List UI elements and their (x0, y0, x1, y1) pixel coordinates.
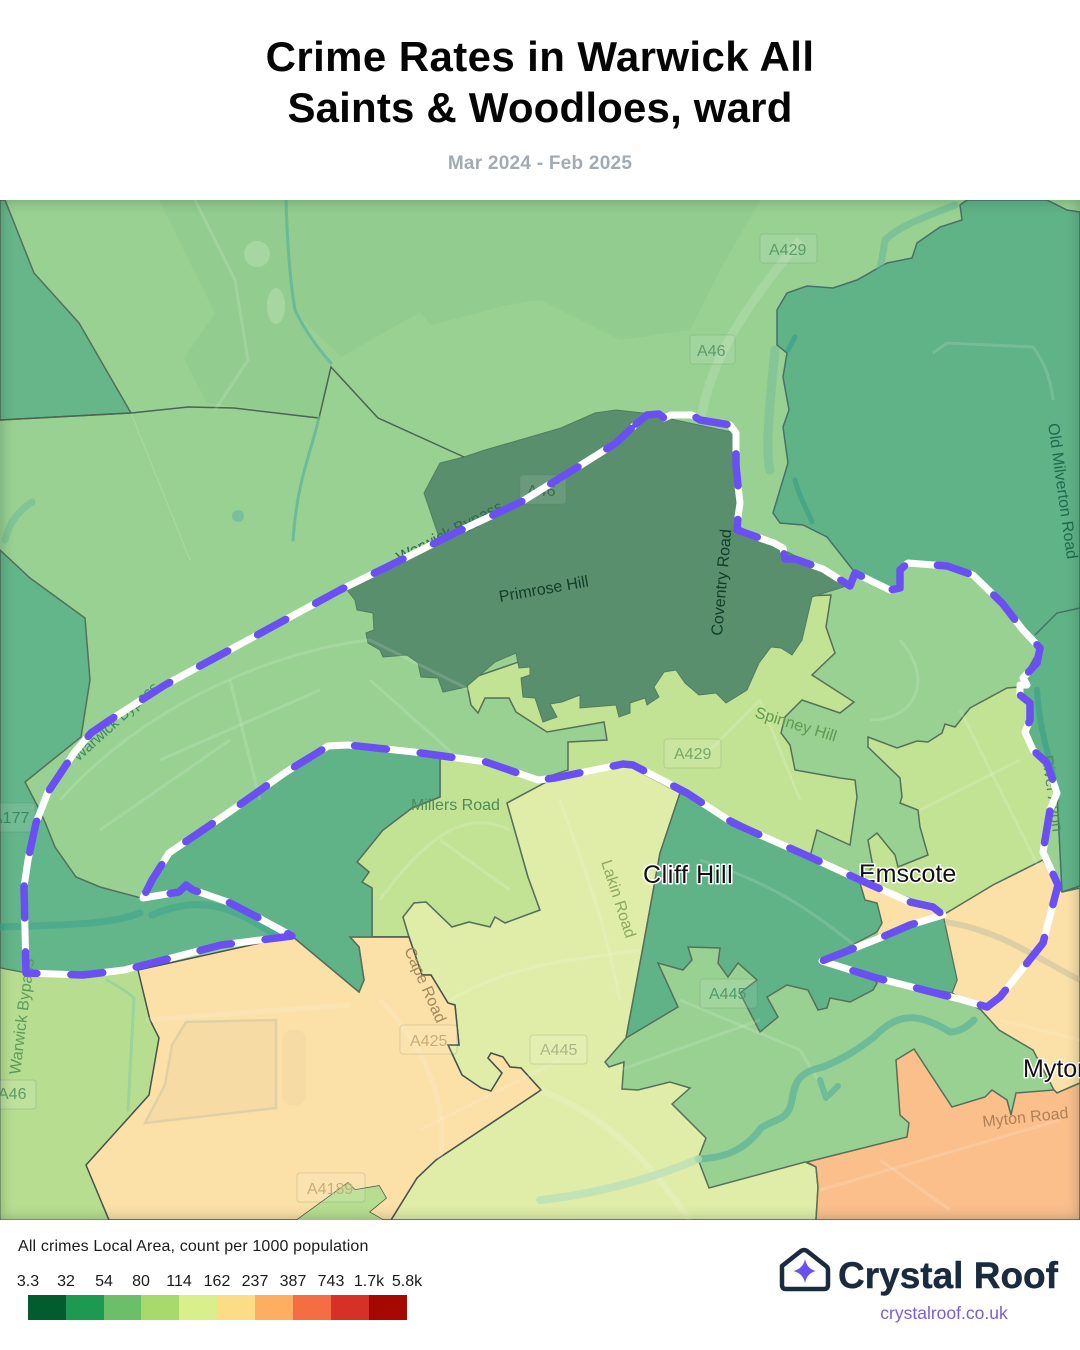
road labels: Warwick Bypass (69, 679, 162, 765)
map edge shading (0, 200, 1080, 1220)
road labels: A429 (769, 242, 806, 259)
region: small green pocket (297, 1183, 386, 1220)
region: Emscote pale orange (943, 860, 1080, 1093)
legend scale labels: 743 (318, 1273, 344, 1290)
legend scale labels (17, 1273, 422, 1290)
legend scale labels: 114 (166, 1273, 192, 1290)
region: north fields, slightly darker (286, 200, 760, 357)
road labels: A46 (697, 343, 726, 360)
road labels (0, 242, 1080, 1198)
legend scale labels: 5.8k (392, 1273, 422, 1290)
icon: Crystal Roof house logo (780, 1248, 830, 1292)
legend colour scale (28, 1295, 407, 1320)
region: Emscote triangle green (822, 915, 957, 993)
place labels (643, 860, 1080, 1083)
region: Lakin Road pale lime (391, 764, 818, 1220)
title (266, 33, 814, 131)
road labels: A46 (527, 483, 556, 500)
place labels: Emscote (859, 860, 956, 888)
legend scale labels: 3.3 (17, 1273, 39, 1290)
river boundary line (1035, 608, 1080, 635)
legend scale labels: 32 (57, 1273, 75, 1290)
airfield outline (145, 1020, 306, 1123)
legend (17, 1238, 422, 1320)
legend scale labels: 54 (95, 1273, 113, 1290)
ward boundary: white underlay and purple dashes (24, 414, 1058, 1007)
region: south-west light green (0, 968, 159, 1220)
road labels: A425 (410, 1033, 447, 1050)
region: inner west green (143, 745, 440, 992)
road labels: Spinney Hill (753, 705, 839, 746)
road labels: A4189 (307, 1181, 353, 1198)
roads and paths (60, 200, 1080, 1220)
railway (945, 922, 1080, 980)
road labels: Primrose Hill (498, 573, 590, 606)
region: north-east dark green (773, 200, 1080, 892)
region borders (0, 367, 464, 457)
title: Crime Rates in Warwick All (266, 33, 814, 80)
road labels: A445 (540, 1042, 577, 1059)
region: Primrose Hill darkest (347, 410, 851, 722)
legend scale labels: 80 (132, 1273, 150, 1290)
website url: crystalroof.co.uk (880, 1303, 1008, 1323)
road labels: Lakin Road (597, 858, 638, 940)
title: Saints & Woodloes, ward (287, 84, 793, 131)
legend title: All crimes Local Area, count per 1000 population (18, 1238, 369, 1255)
legend scale labels: 1.7k (354, 1273, 384, 1290)
region: Warwick pale orange (86, 936, 541, 1220)
choropleth map (0, 200, 1080, 1220)
region: central yellow-green (466, 595, 857, 857)
place labels: Cliff Hill (643, 861, 733, 889)
logo wordmark: Crystal Roof (838, 1255, 1058, 1296)
region: Myton orange (807, 1049, 1080, 1220)
road shields (0, 234, 817, 1202)
road labels: A429 (674, 746, 711, 763)
region: Cliff Hill green (626, 793, 882, 1038)
region: Millers Road yellow-green (357, 757, 552, 937)
legend scale labels: 387 (280, 1273, 306, 1290)
rivers (0, 200, 1055, 1200)
road labels: Warwick Bypass (7, 958, 38, 1075)
legend scale labels: 237 (242, 1273, 268, 1290)
road labels: Myton Road (982, 1105, 1069, 1131)
lakes (244, 241, 285, 324)
region: west dark green (0, 550, 292, 975)
road labels: Millers Road (411, 797, 500, 814)
road labels: Coventry Road (709, 529, 735, 636)
legend scale labels: 162 (204, 1273, 230, 1290)
region: north park, slightly darker (159, 200, 331, 417)
subtitle: date range: Mar 2024 - Feb 2025 (448, 153, 632, 174)
region: north-west dark green (0, 200, 131, 420)
region: east yellow-green (860, 687, 1057, 915)
road labels: A445 (709, 986, 746, 1003)
road labels: Old Milverton Road (1044, 422, 1080, 560)
road labels: River Avon (1038, 754, 1066, 833)
road labels: Warwick Bypass (394, 498, 506, 567)
road labels: Cape Road (400, 945, 449, 1026)
